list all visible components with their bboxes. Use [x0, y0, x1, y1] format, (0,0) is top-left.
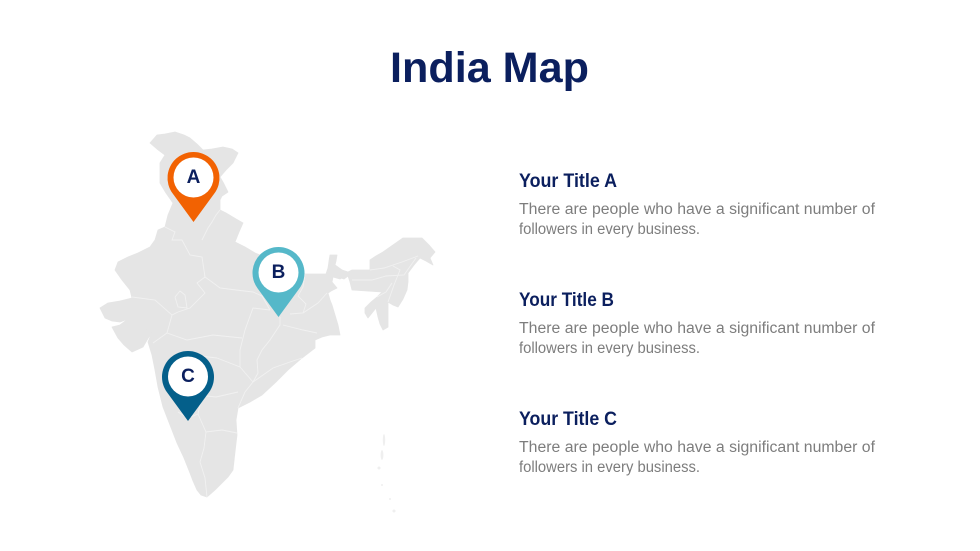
heading C: Your Title C — [519, 409, 617, 430]
text block C — [519, 409, 876, 476]
map pin B — [252, 247, 304, 317]
north-east region — [338, 238, 435, 330]
Andaman and Nicobar islands — [378, 434, 396, 512]
state borders — [132, 210, 418, 497]
map pin B: B — [272, 262, 285, 283]
map pin C: C — [181, 366, 195, 387]
text block B — [519, 290, 876, 357]
map pin A — [168, 152, 220, 222]
map of India — [100, 132, 435, 512]
text block A — [519, 171, 876, 238]
heading B: Your Title B — [519, 290, 614, 311]
description B: There are people who have a significant number of — [519, 320, 876, 337]
title: India Map — [390, 44, 589, 92]
description C: There are people who have a significant number of — [519, 439, 876, 456]
description A: followers in every business. — [519, 221, 700, 238]
heading A: Your Title A — [519, 171, 617, 192]
mainland shape — [100, 132, 345, 497]
description C: followers in every business. — [519, 459, 700, 476]
map pin A: A — [187, 167, 201, 188]
map pin C — [162, 351, 214, 421]
description A: There are people who have a significant number of — [519, 201, 876, 218]
description B: followers in every business. — [519, 340, 700, 357]
